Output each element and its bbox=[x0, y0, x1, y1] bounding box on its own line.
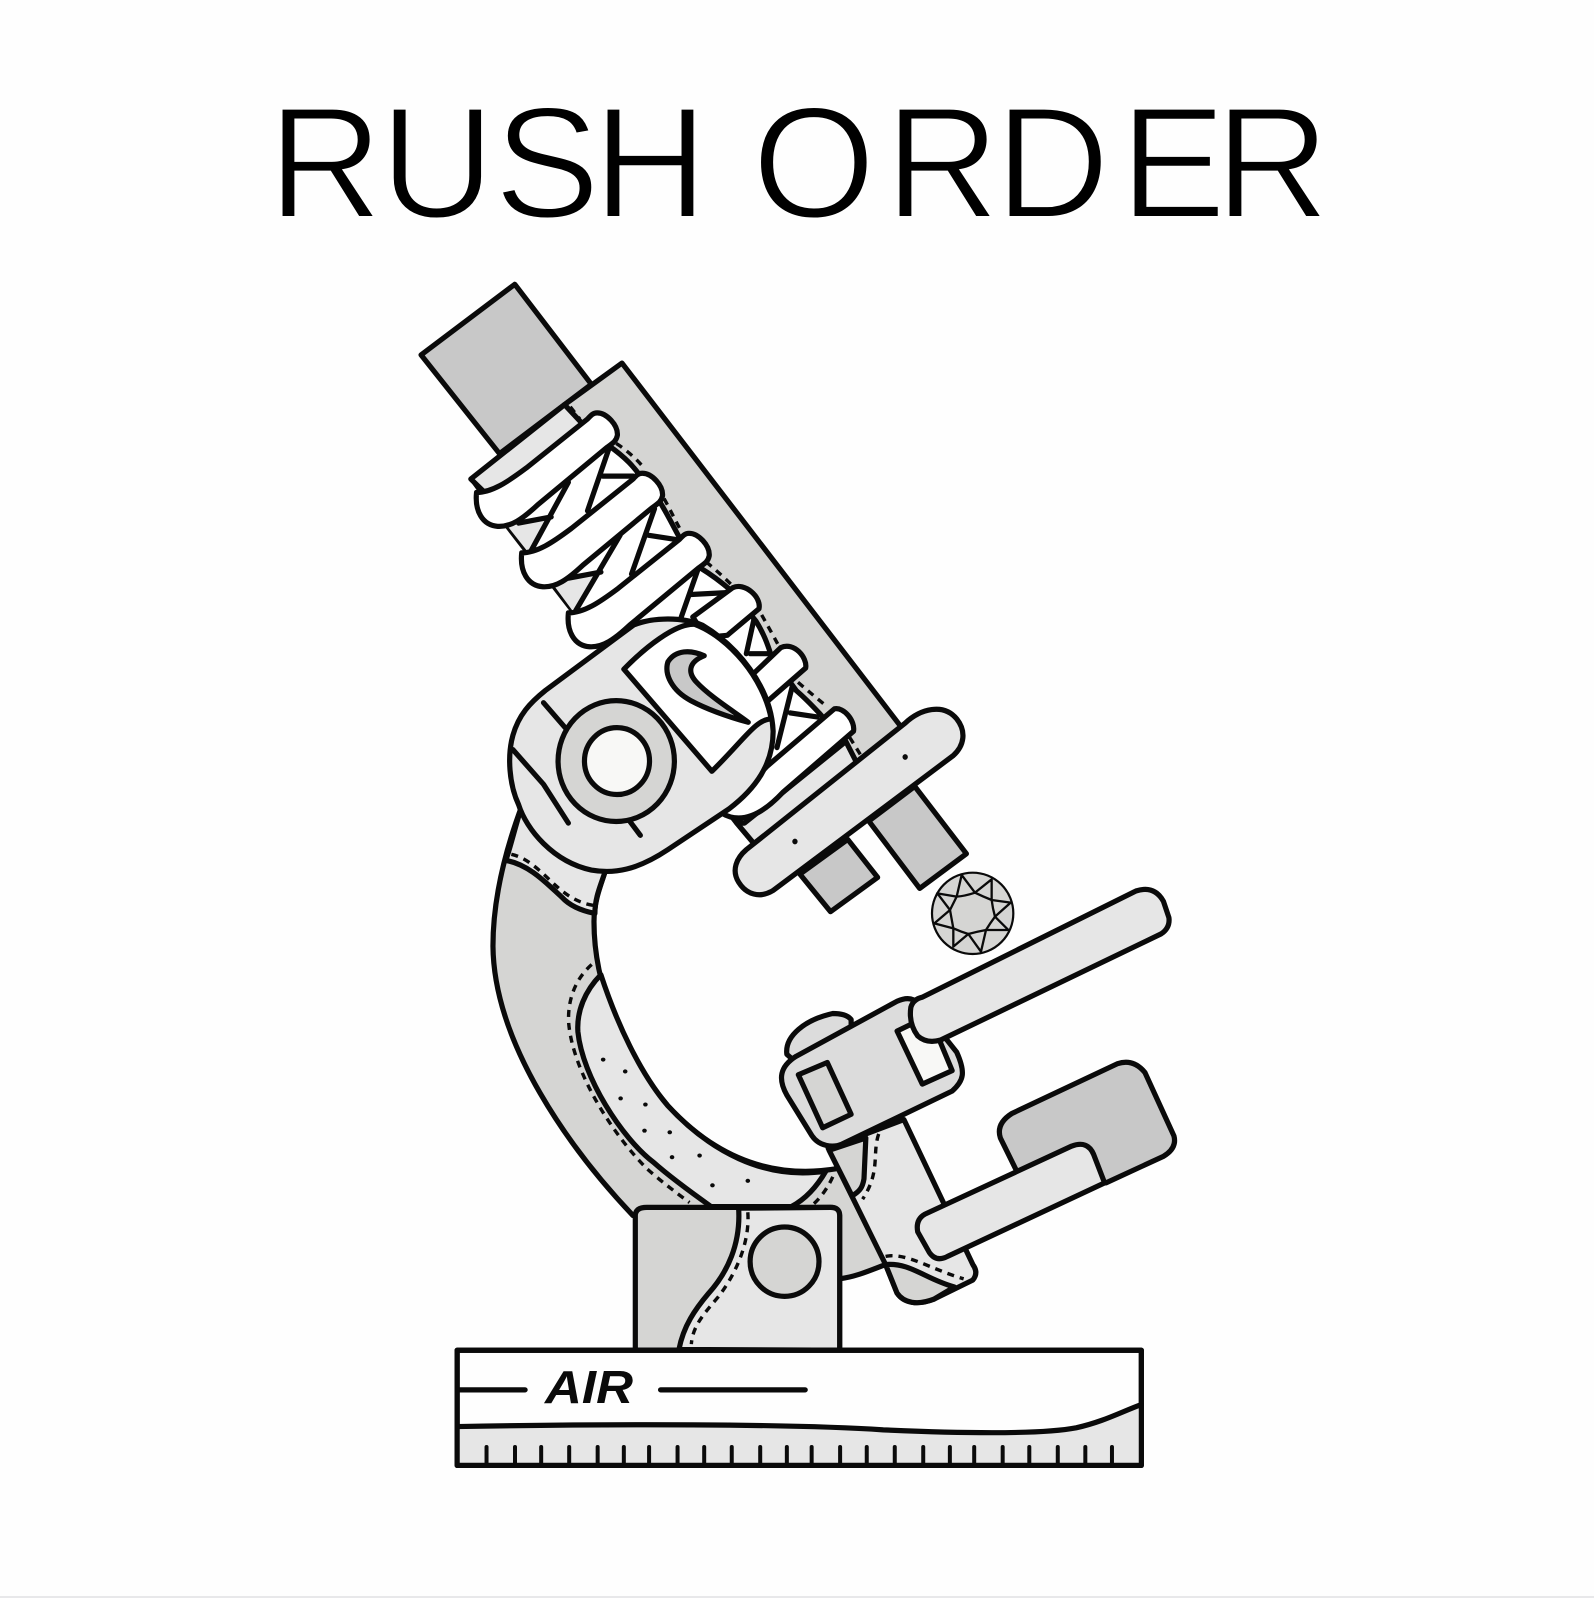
microscope lower section bbox=[457, 804, 1175, 1465]
base plate sole bbox=[457, 1350, 1141, 1465]
base block bbox=[635, 1207, 840, 1350]
back panel bbox=[565, 363, 901, 764]
lace band six bbox=[721, 709, 854, 818]
lace band three bbox=[568, 533, 709, 647]
microscope head bbox=[510, 619, 773, 871]
icon: swoosh bbox=[667, 652, 748, 722]
lace band four bbox=[693, 586, 759, 637]
lace band two bbox=[521, 473, 663, 587]
lower plate bbox=[999, 1062, 1175, 1183]
curved arm bbox=[493, 804, 886, 1279]
top collar bbox=[471, 405, 591, 507]
crossbar bbox=[735, 709, 963, 895]
focus knob bbox=[558, 701, 674, 821]
icon: diamond bbox=[932, 873, 1013, 954]
stage slide bar bbox=[910, 889, 1169, 1041]
objective lens left bbox=[800, 839, 878, 912]
laced tube bbox=[473, 405, 857, 844]
microscope upper section bbox=[421, 284, 966, 912]
eyepiece bbox=[421, 284, 591, 454]
lace band one bbox=[476, 413, 617, 526]
lace band five bbox=[744, 646, 806, 705]
stage clamp bbox=[781, 999, 962, 1146]
objective lens right bbox=[869, 786, 966, 888]
focus column bbox=[828, 1120, 976, 1303]
AIR label: AIR bbox=[544, 1361, 633, 1413]
lower adjuster bar bbox=[917, 1144, 1105, 1259]
title: RUSH ORDER bbox=[268, 74, 1330, 252]
